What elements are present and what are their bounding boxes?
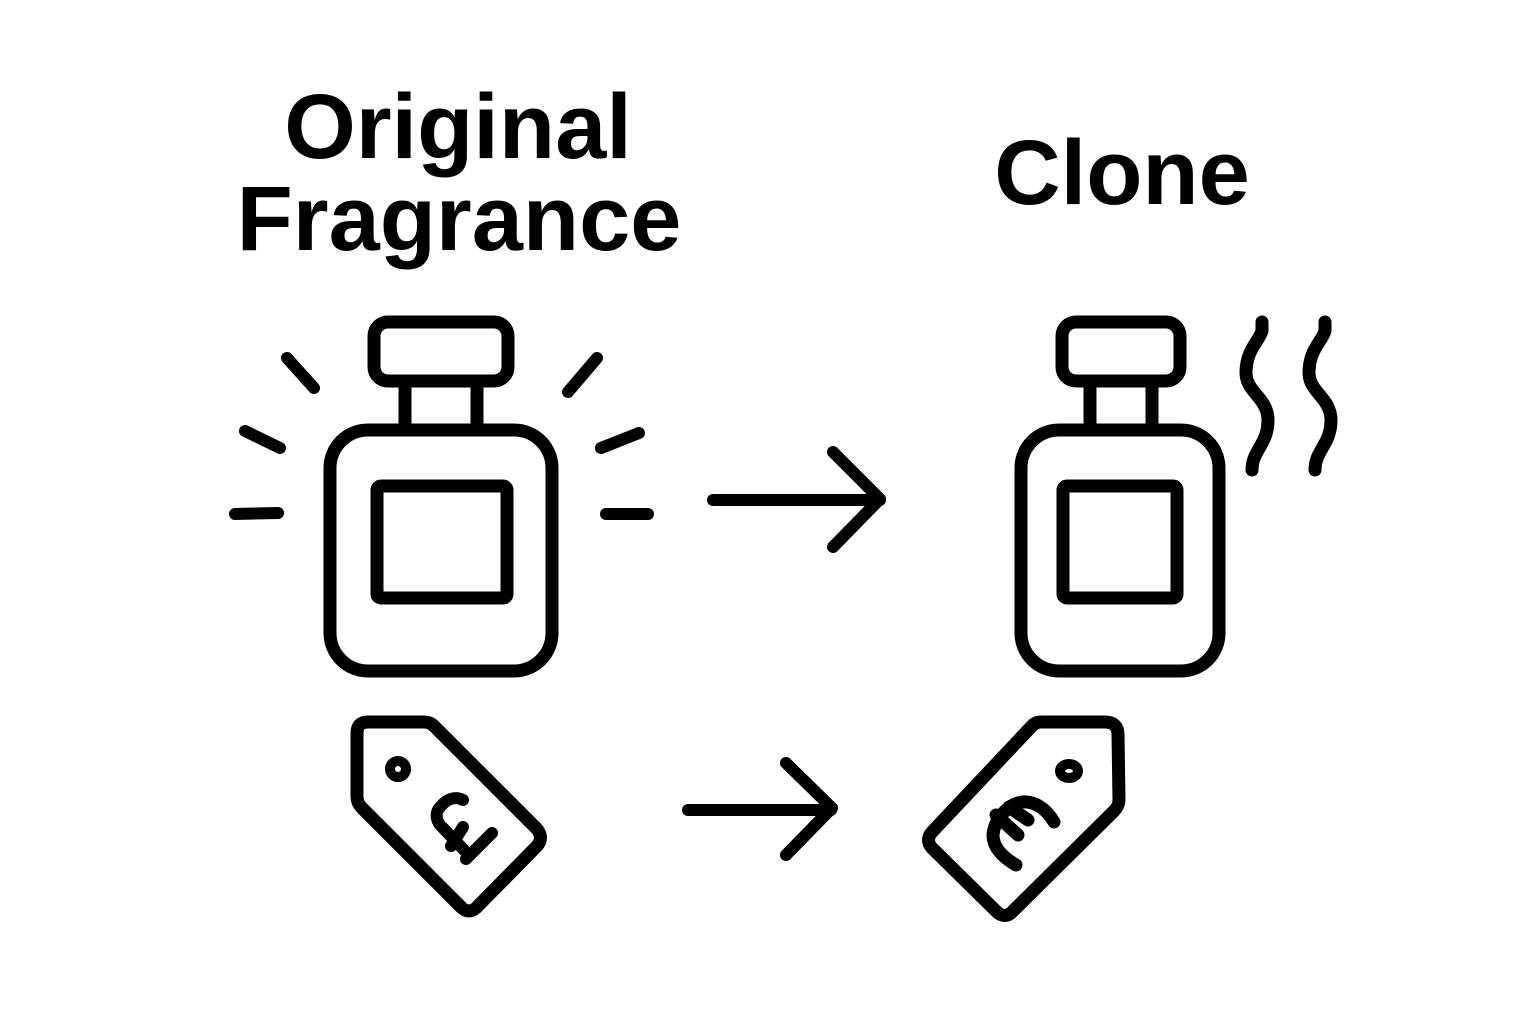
heading: Original Fragrance: Original <box>284 76 632 178</box>
arrow: bottle to clone <box>713 452 880 547</box>
icon: pound price tag <box>357 722 540 911</box>
arrow: price to lower price <box>688 763 832 855</box>
icon: scent waves <box>1246 322 1331 470</box>
heading: Original Fragrance: Fragrance <box>237 168 681 270</box>
icon: euro price tag <box>928 722 1119 916</box>
icon: original perfume bottle <box>330 322 552 671</box>
heading: Clone: Clone <box>994 122 1250 224</box>
icon: shine rays around original bottle <box>235 358 648 514</box>
icon: clone perfume bottle <box>1021 322 1219 671</box>
heading: Original Fragrance <box>237 76 681 270</box>
